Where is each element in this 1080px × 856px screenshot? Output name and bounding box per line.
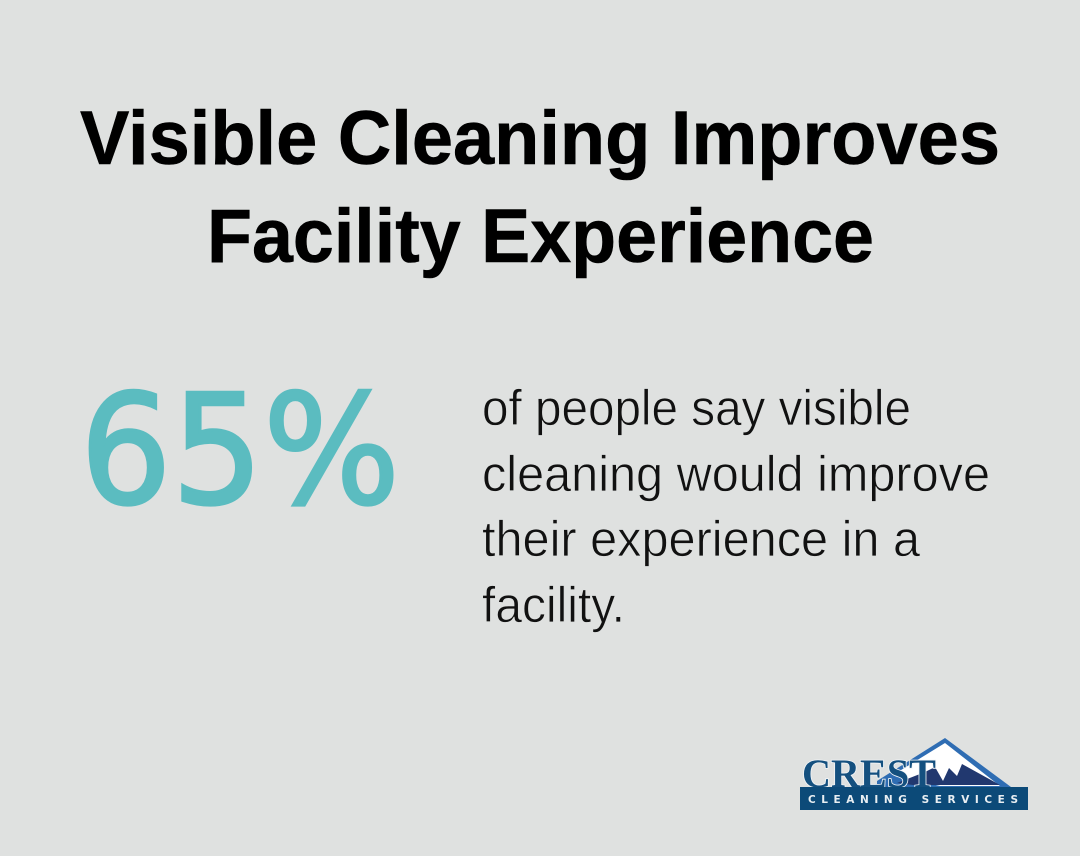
big statistic: 65%: 65% — [80, 362, 400, 539]
statistic description: cleaning would improve — [482, 446, 990, 502]
statistic description — [482, 380, 990, 633]
title — [80, 96, 1000, 279]
statistic description: of people say visible — [482, 380, 911, 436]
logo tagline: CLEANING SERVICES — [808, 794, 1018, 806]
logo wordmark: CREST: CREST — [802, 751, 936, 796]
title: Visible Cleaning Improves — [80, 96, 1000, 181]
logo mountain — [877, 738, 1011, 787]
logo banner — [800, 787, 1028, 810]
logo: Crest Cleaning Services — [800, 738, 1028, 810]
statistic description: facility. — [482, 577, 625, 633]
statistic description: their experience in a — [482, 511, 920, 567]
title: Facility Experience — [207, 194, 874, 279]
